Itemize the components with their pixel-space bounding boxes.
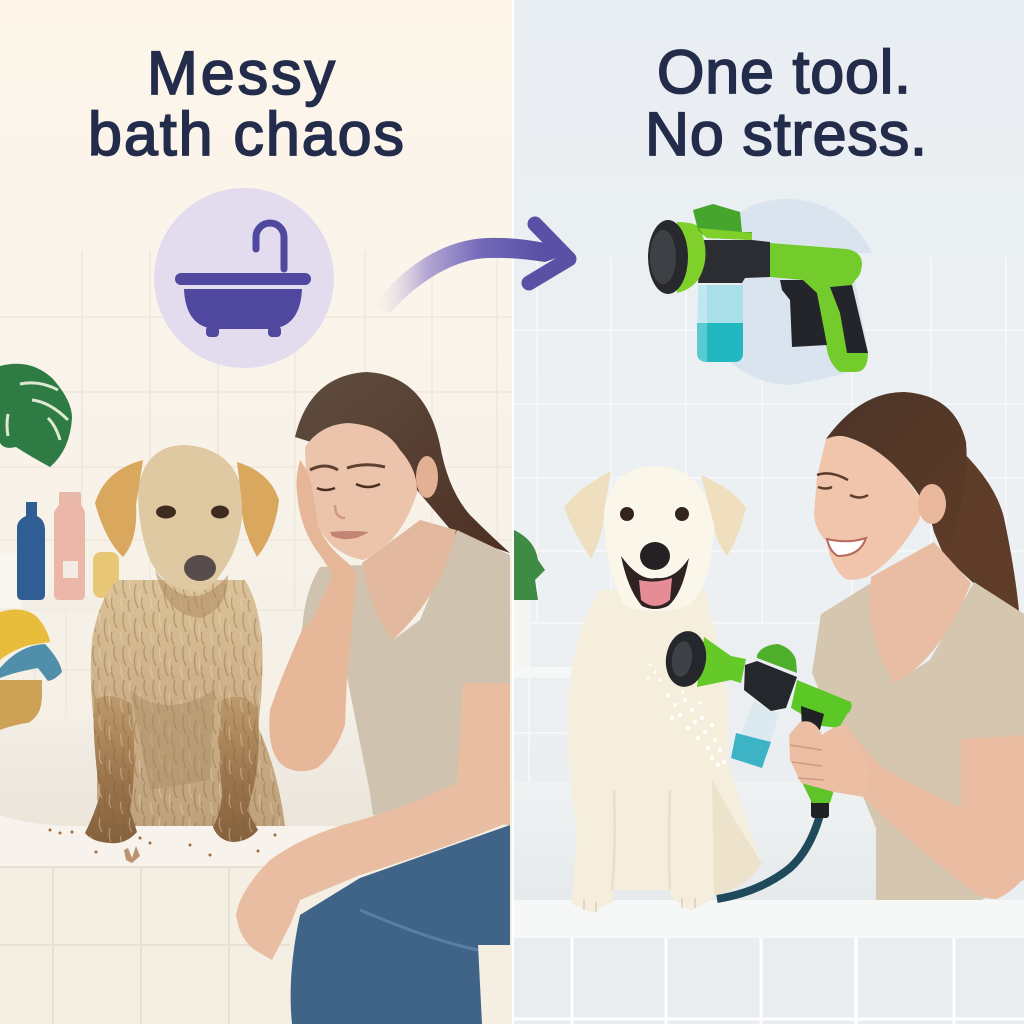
heading line: bath chaos: bath chaos: [88, 100, 404, 168]
face: [814, 436, 921, 580]
closed eyes: [317, 484, 380, 490]
shirt: [302, 530, 510, 825]
icon: spray tool product: [648, 199, 872, 385]
raised hand: [296, 460, 357, 585]
right front leg: [213, 697, 259, 842]
ponytail: [934, 440, 1019, 611]
illustration: clean white dog: [564, 466, 762, 913]
illustration: shelf with bottles: [0, 492, 119, 610]
neck: [362, 520, 456, 640]
cap: [693, 204, 752, 240]
illustration: hose: [717, 815, 820, 899]
illustration: left tub: [0, 718, 512, 1024]
panel: messy bath background: [0, 0, 512, 1024]
brow and eye: [817, 473, 868, 498]
panel: calm bath background: [514, 0, 1024, 1024]
illustration: monstera plant left: [0, 364, 72, 467]
left front leg: [85, 696, 137, 843]
smile: [827, 538, 866, 556]
tongue: [639, 578, 672, 606]
illustration: right tub: [514, 667, 1024, 1024]
hair: [826, 392, 967, 545]
ear: [416, 456, 438, 498]
eyes: [620, 507, 634, 521]
cap: [757, 644, 797, 673]
bottle: [731, 701, 779, 768]
black body: [698, 240, 770, 283]
nozzle green: [697, 637, 746, 687]
hand: [789, 721, 870, 797]
eyes: [156, 506, 176, 518]
connector: [811, 800, 829, 818]
arm: [847, 725, 1024, 899]
handle lower: [801, 780, 834, 803]
supporting arm: [269, 570, 357, 771]
illustration: smiling woman: [812, 392, 1024, 900]
chest mud: [130, 690, 215, 790]
upper arm right: [440, 683, 510, 825]
rump shading: [712, 780, 762, 895]
illustration: spray tool in hand: [662, 628, 870, 818]
head: [604, 466, 714, 611]
nose: [184, 555, 216, 581]
shirt: [812, 582, 1024, 900]
illustration: mud specks on rim: [48, 828, 276, 863]
leg shading: [612, 790, 670, 890]
illustration: towels and basket: [0, 610, 62, 735]
forearm and hand: [236, 760, 510, 960]
barrel: [791, 680, 852, 728]
ears: [564, 471, 611, 559]
backing circle: [728, 199, 872, 385]
finger lines: [790, 745, 824, 780]
illustration: tired woman: [236, 372, 510, 1024]
nozzle: [648, 220, 688, 294]
heading: messy bath chaos: Messy: [147, 39, 336, 107]
nose: [640, 542, 670, 570]
body: [91, 580, 285, 826]
black body: [744, 661, 797, 711]
mud chin: [155, 570, 228, 618]
heading line: no stress: No stress.: [645, 100, 927, 168]
mouth: [621, 556, 689, 609]
barrel and rear handle: [770, 243, 868, 372]
head: [138, 445, 243, 592]
illustration: water spray mist: [646, 664, 726, 767]
icon: bathtub in lilac circle: [154, 188, 334, 368]
arrow: from messy to calm: [372, 224, 569, 313]
divider between panels: [512, 0, 514, 1024]
illustration: plant right: [514, 530, 545, 670]
grip: [780, 280, 827, 347]
heading: one tool: One tool.: [657, 38, 911, 106]
green ring: [677, 222, 706, 293]
neck: [869, 542, 971, 683]
nozzle head: [662, 628, 710, 690]
toes: [584, 898, 695, 912]
nose and mouth: [335, 505, 345, 518]
grip: [801, 706, 824, 730]
brows: [310, 465, 385, 470]
ear: [918, 484, 946, 524]
face: [305, 423, 417, 560]
hair back: [295, 372, 510, 553]
ears: [95, 460, 143, 557]
rear dark panel: [830, 285, 868, 353]
illustration: muddy dog: [85, 445, 285, 843]
bottle: [697, 285, 743, 362]
jeans: [291, 825, 510, 1024]
body: [568, 590, 762, 913]
